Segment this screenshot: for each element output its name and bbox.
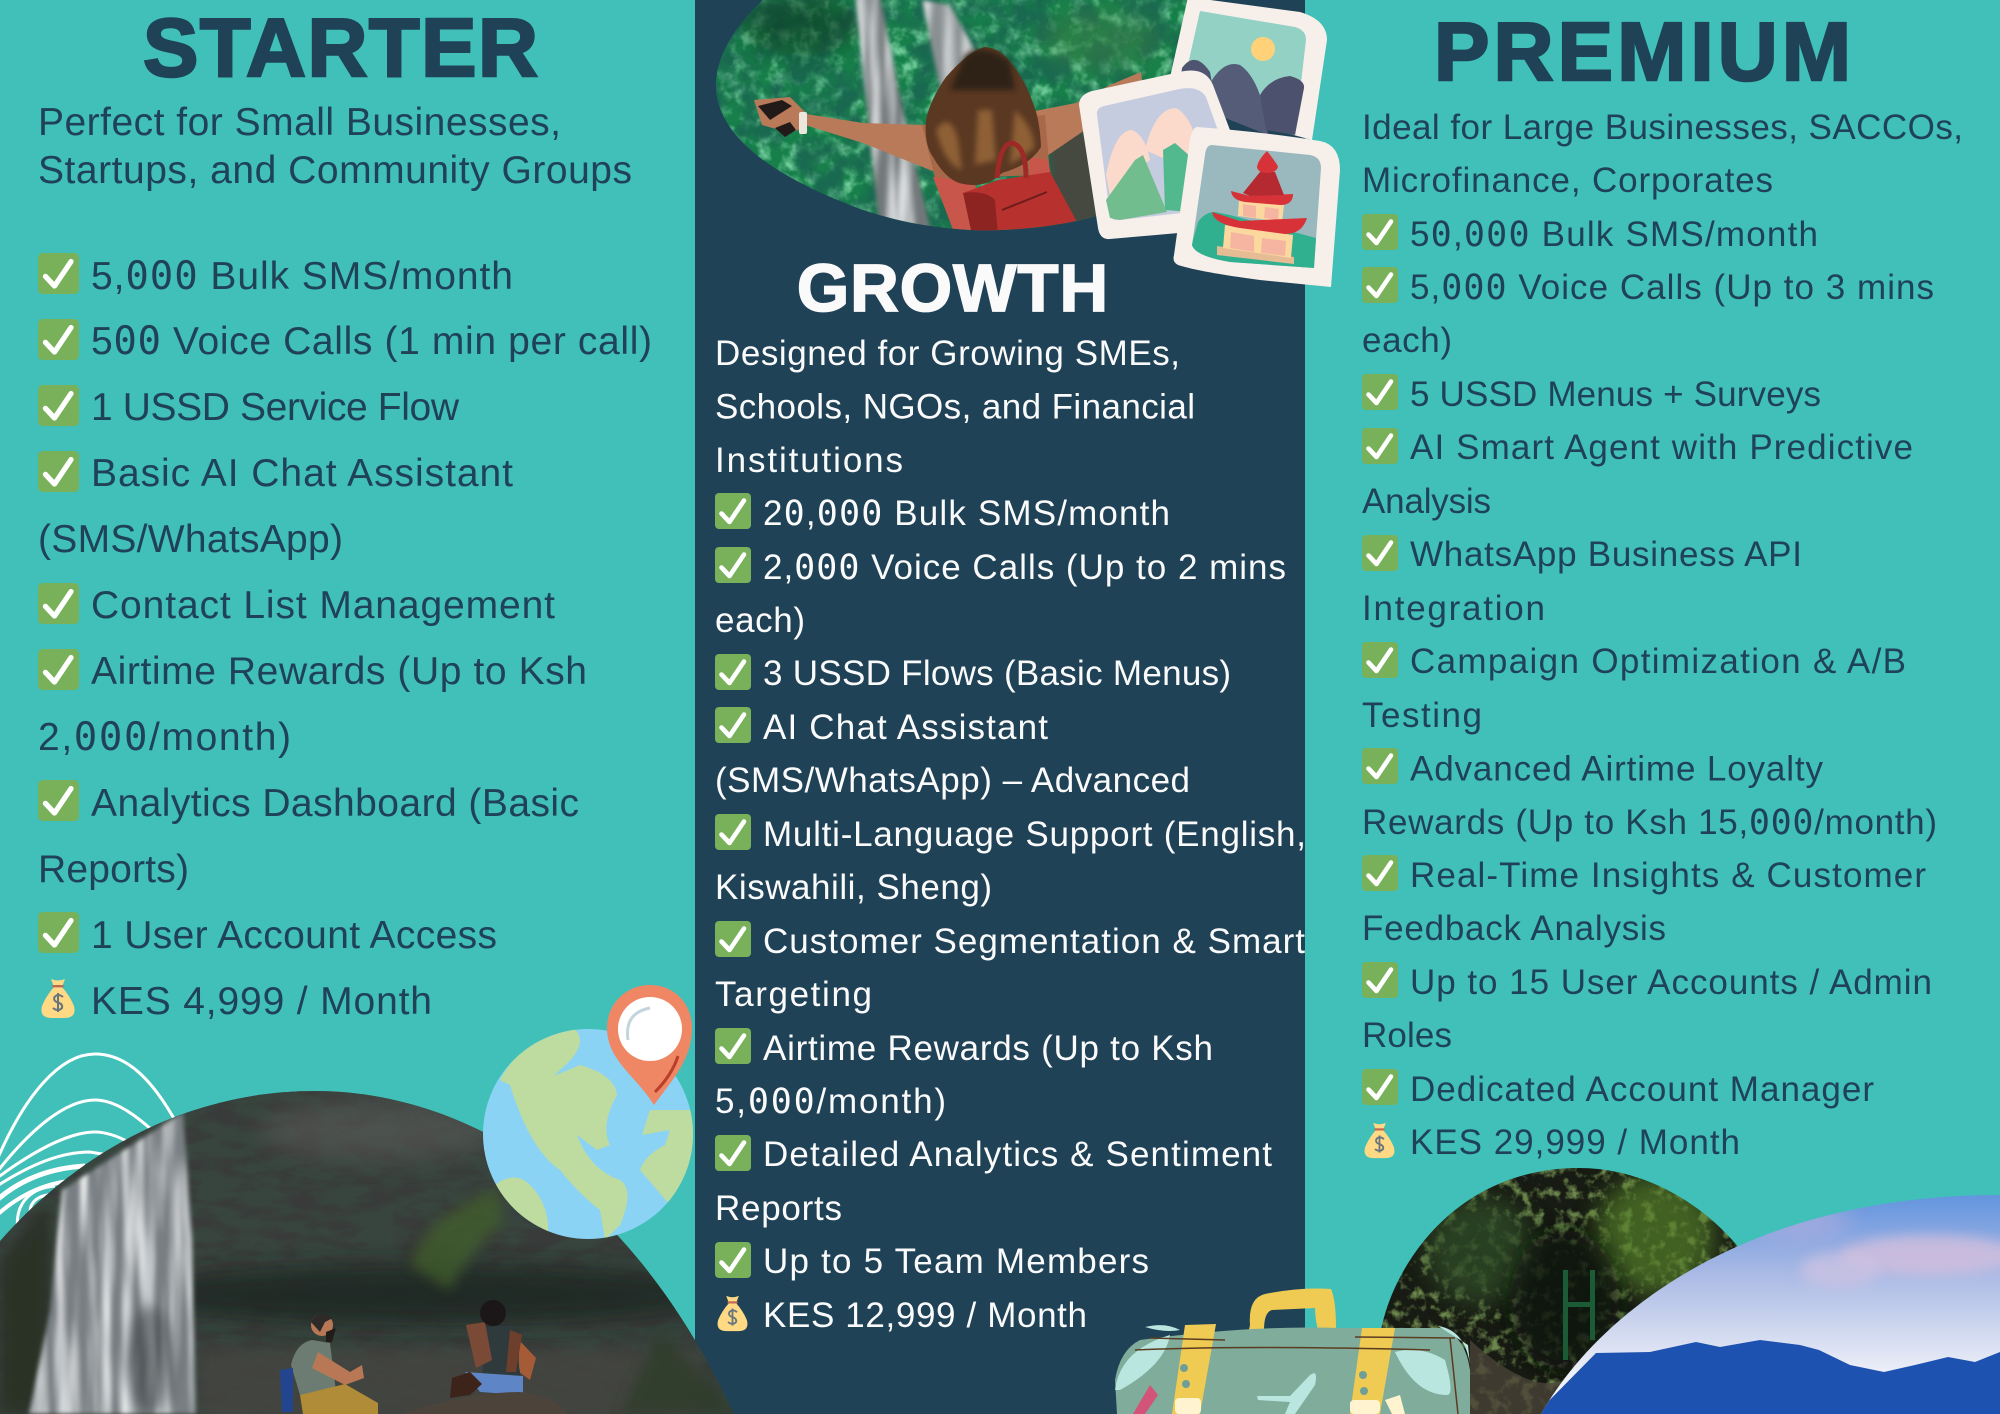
feature list: KES 12,999 / Month xyxy=(763,1296,1087,1335)
feature list: 1 User Account Access xyxy=(91,914,497,957)
feature list: Customer Segmentation & Smart xyxy=(763,922,1305,961)
woman: back xyxy=(922,115,1050,178)
feature list: 3 USSD Flows (Basic Menus) xyxy=(763,654,1231,693)
photo: waterfall and hikers xyxy=(0,1085,740,1414)
feature list: Reports) xyxy=(38,848,189,891)
frame: pagoda xyxy=(1174,127,1340,287)
photo frames illustration xyxy=(1079,0,1340,287)
feature list: Up to 5 Team Members xyxy=(763,1242,1149,1281)
panel: growth content xyxy=(715,334,1306,1335)
feature list: KES 29,999 / Month xyxy=(1410,1123,1740,1162)
feature list: Airtime Rewards (Up to Ksh xyxy=(91,650,587,693)
audience description: Schools, NGOs, and Financial xyxy=(715,388,1195,426)
feature list: Analytics Dashboard (Basic xyxy=(91,782,579,825)
feature list: (SMS/WhatsApp) – Advanced xyxy=(715,761,1190,800)
feature list: 5,000 Bulk SMS/month xyxy=(91,254,513,299)
feature list: Reports xyxy=(715,1189,842,1228)
feature list: Targeting xyxy=(715,975,872,1014)
feature list: Integration xyxy=(1362,589,1545,628)
feature list xyxy=(38,253,652,1023)
feature list: Basic AI Chat Assistant xyxy=(91,452,513,495)
audience description: Startups, and Community Groups xyxy=(38,149,632,192)
feature list: AI Chat Assistant xyxy=(763,708,1048,747)
hiker: man xyxy=(280,1314,378,1414)
vegetation on cliff xyxy=(410,1190,502,1290)
feature list: Campaign Optimization & A/B xyxy=(1410,642,1906,681)
audience description: Institutions xyxy=(715,441,903,480)
feature list: Airtime Rewards (Up to Ksh xyxy=(763,1029,1213,1068)
feature list: 50,000 Bulk SMS/month xyxy=(1410,215,1818,255)
feature list: Roles xyxy=(1362,1016,1452,1055)
feature list: 5,000/month) xyxy=(715,1082,946,1122)
heading: growth: GROWTH xyxy=(797,251,1108,326)
feature list: 2,000 Voice Calls (Up to 2 mins xyxy=(763,548,1286,588)
frame: sun and mountains xyxy=(1165,0,1327,140)
icon: map pin xyxy=(607,985,692,1105)
panel: growth background xyxy=(695,0,1305,1414)
feature list: each) xyxy=(715,601,805,640)
audience description xyxy=(1362,108,1963,200)
feature list: Analysis xyxy=(1362,482,1491,521)
decorative white line art xyxy=(0,1054,176,1240)
woman: dress xyxy=(933,177,980,235)
feature list: each) xyxy=(1362,321,1452,360)
photo: forest bridge xyxy=(1382,1168,1738,1414)
audience description xyxy=(715,334,1195,480)
woman: arms xyxy=(800,113,935,172)
heading: starter: STARTER xyxy=(143,1,538,94)
feature list: Real-Time Insights & Customer xyxy=(1410,856,1926,895)
feature list: Kiswahili, Sheng) xyxy=(715,868,992,907)
icon: suitcase xyxy=(1115,1289,1470,1414)
hiker: woman xyxy=(450,1300,536,1398)
feature list: 5 USSD Menus + Surveys xyxy=(1410,375,1821,414)
feature list: Feedback Analysis xyxy=(1362,909,1666,948)
audience description: Designed for Growing SMEs, xyxy=(715,334,1180,373)
feature list: 2,000/month) xyxy=(38,715,291,760)
feature list: Detailed Analytics & Sentiment xyxy=(763,1135,1272,1174)
backpack xyxy=(963,172,1078,235)
feature list: 500 Voice Calls (1 min per call) xyxy=(91,319,652,364)
feature list: (SMS/WhatsApp) xyxy=(38,518,343,561)
audience description: Microfinance, Corporates xyxy=(1362,161,1773,200)
feature list: KES 4,999 / Month xyxy=(91,980,432,1023)
feature list: Testing xyxy=(1362,696,1482,735)
feature list xyxy=(715,493,1306,1335)
rock xyxy=(402,1392,567,1414)
waterfalls xyxy=(852,0,978,226)
woman: hair xyxy=(926,47,1041,185)
icon: globe xyxy=(483,1029,695,1245)
feature list: Advanced Airtime Loyalty xyxy=(1410,750,1824,788)
feature list: 1 USSD Service Flow xyxy=(91,386,460,429)
audience description: Ideal for Large Businesses, SACCOs, xyxy=(1362,108,1963,147)
photo: blue mountains and sky xyxy=(1530,1190,2000,1414)
waterfall xyxy=(20,1105,205,1414)
feature list: WhatsApp Business API xyxy=(1410,535,1802,574)
feature list: 20,000 Bulk SMS/month xyxy=(763,494,1170,534)
feature list xyxy=(1362,214,1937,1162)
feature list: Up to 15 User Accounts / Admin xyxy=(1410,963,1932,1002)
feature list: Dedicated Account Manager xyxy=(1410,1070,1874,1109)
feature list: 5,000 Voice Calls (Up to 3 mins xyxy=(1410,268,1934,308)
audience description: Perfect for Small Businesses, xyxy=(38,101,561,144)
frame: snowy peaks xyxy=(1079,71,1245,239)
photo: woman at waterfall xyxy=(710,0,1210,240)
feature list: Rewards (Up to Ksh 15,000/month) xyxy=(1362,803,1937,843)
panel: starter xyxy=(38,1,652,1023)
feature list: Contact List Management xyxy=(91,584,555,627)
panel: premium content xyxy=(1362,108,1963,1162)
heading: premium: PREMIUM xyxy=(1434,5,1851,98)
audience description xyxy=(38,101,632,192)
feature list: AI Smart Agent with Predictive xyxy=(1410,428,1913,467)
feature list: Multi-Language Support (English, xyxy=(763,815,1306,854)
